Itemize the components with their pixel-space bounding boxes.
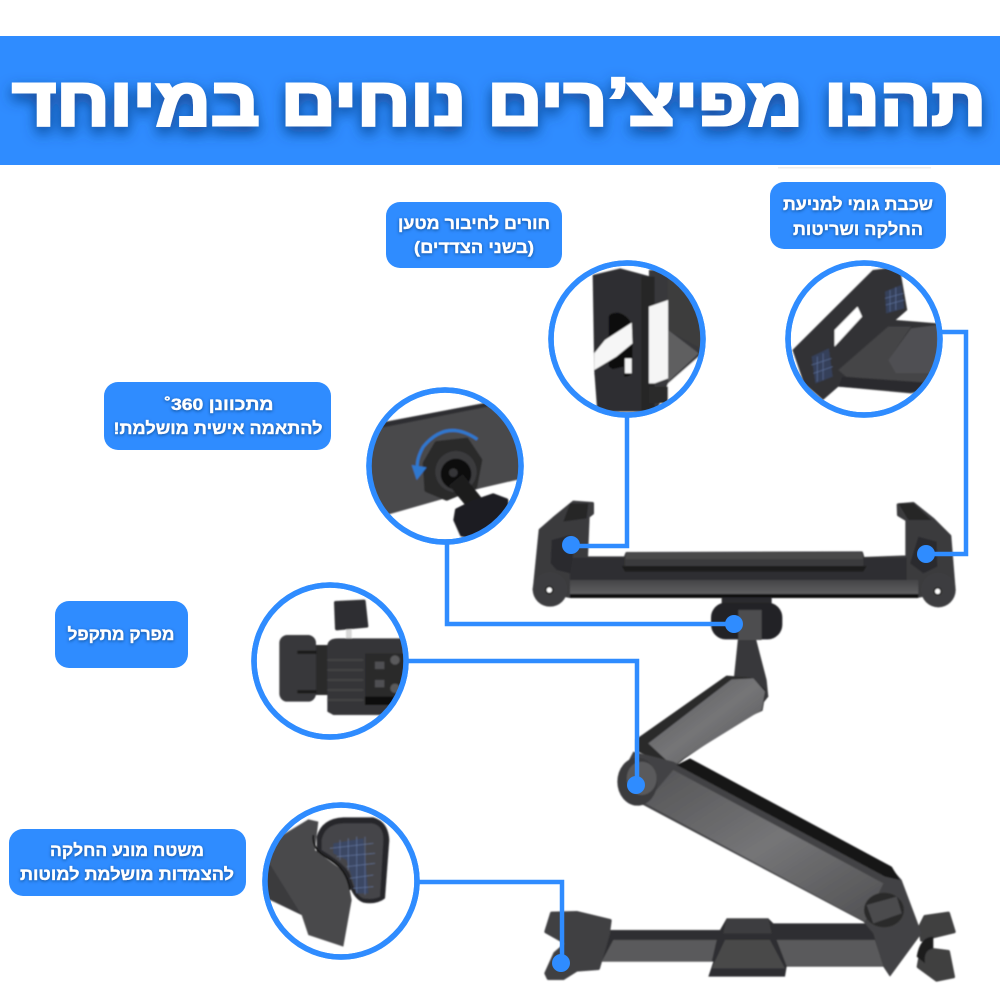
label: rubber layer [770, 182, 946, 249]
detail circle: 360 rotation [368, 390, 523, 542]
label: rubber layer: שכבת גומי למניעת [783, 195, 933, 214]
label: base grip: להצמדות מושלמת למוטות [20, 865, 234, 884]
label: charger holes: חורים לחיבור מטען [398, 214, 550, 233]
ball joint [733, 635, 768, 705]
connector: base grip [417, 882, 562, 963]
label: 360 rotation: מתכוונן 360˚ [164, 395, 274, 414]
label: folding joint: מפרק מתקפל [68, 625, 174, 644]
label: charger holes: (בשני הצדדים) [414, 238, 534, 257]
label: 360 rotation: להתאמה אישית מושלמת! [114, 419, 322, 438]
header banner: תהנו מפיצ’רים נוחים במיוחד [12, 64, 986, 140]
detail circle: rubber layer [788, 263, 940, 415]
detail circle: folding joint [254, 585, 407, 737]
upper arm [637, 677, 765, 767]
label: rubber layer: החלקה ושריטות [793, 220, 923, 239]
header banner [0, 36, 1000, 165]
detail circle: base grip [263, 805, 417, 957]
label: 360 rotation [104, 382, 331, 450]
tablet holder bar [533, 502, 956, 705]
connector: rubber layer [926, 332, 966, 554]
product: tablet holder arm [533, 502, 956, 980]
connector: charger holes [571, 414, 627, 546]
label: base grip [9, 829, 246, 896]
detail circle: charger holes [551, 263, 704, 417]
lower arm and base [546, 752, 954, 980]
marker dots [552, 536, 935, 972]
connector: 360 rotation [447, 543, 734, 624]
label: base grip: משטח מונע החלקה [50, 841, 204, 860]
connector: folding joint [406, 661, 637, 785]
label: charger holes [386, 202, 562, 268]
label: folding joint [55, 601, 188, 668]
